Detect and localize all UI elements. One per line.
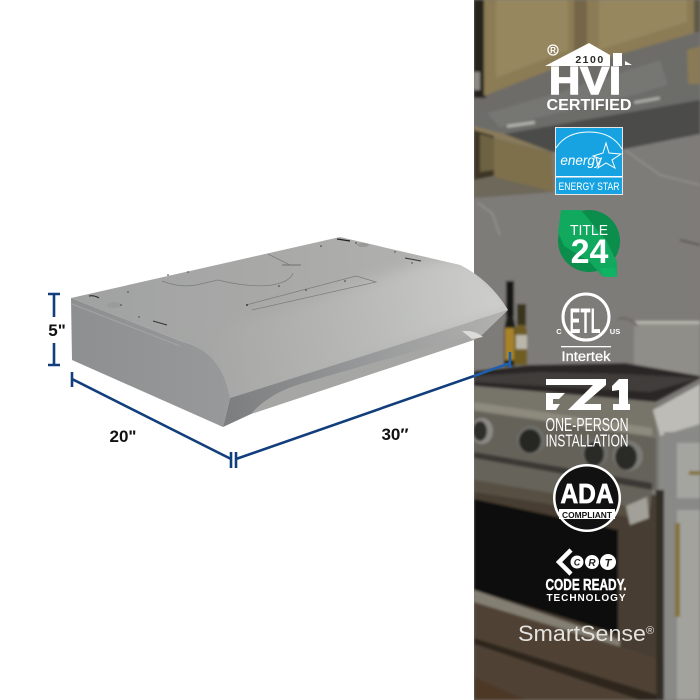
product: range hood (71, 237, 520, 427)
badge: EZ1 one-person installation (546, 379, 630, 450)
badge: Code Ready Technology: CODE READY. (546, 577, 626, 594)
dimension: height 5 inches (48, 294, 66, 365)
hood front curved panel (192, 260, 508, 398)
badge: HVI certified: 2100 (575, 54, 605, 66)
pot (634, 323, 700, 376)
control panel (474, 411, 656, 490)
badge: EZ1 one-person installation: ONE-PERSON (546, 415, 628, 435)
badge: EZ1 one-person installation: INSTALLATION (546, 430, 628, 450)
dimension: depth 20 inches: 20" (110, 427, 136, 446)
hood side face (71, 298, 230, 427)
badge: ETL listed Intertek: Intertek (562, 349, 611, 364)
dimension: width 30 inches: 30″ (381, 425, 409, 444)
badge: Energy Star: energy (560, 153, 603, 168)
badge: HVI certified: CERTIFIED (546, 97, 632, 114)
badge: Code Ready Technology: C (574, 558, 581, 568)
oven (474, 491, 658, 658)
badge: Energy Star (556, 128, 622, 194)
kitchen photo background (471, 0, 700, 700)
right cabinets (658, 424, 700, 492)
badge: ETL listed Intertek (556, 294, 620, 364)
dimension: depth 20 inches (72, 372, 231, 468)
badge: Title 24: TITLE (570, 222, 608, 239)
badge: Code Ready Technology: TECHNOLOGY (546, 593, 626, 604)
bottles (506, 281, 514, 317)
badge: ETL listed Intertek: C (556, 327, 562, 336)
hood lower front lip (223, 310, 508, 427)
stove top (474, 363, 700, 402)
dimension: height 5 inches: 5" (48, 321, 66, 340)
hood mounting holes (89, 239, 421, 325)
badge: HVI certified: HVI (549, 60, 621, 103)
badge: ADA compliant (553, 464, 621, 532)
badge: HVI certified: R (550, 46, 556, 55)
badge: Code Ready Technology: T (605, 558, 613, 570)
hood top panel outlines (162, 254, 376, 310)
badge: Title 24: 24 (571, 233, 608, 271)
badge: SmartSense: ® (646, 625, 654, 637)
badge: Code Ready Technology: R (588, 558, 596, 569)
badge: Code Ready Technology (546, 550, 626, 604)
hood top surface (71, 237, 508, 398)
badge: ETL listed Intertek: ETL (570, 302, 600, 341)
badge: ETL listed Intertek: LISTED (579, 338, 593, 342)
badge: SmartSense: SmartSense (518, 621, 646, 646)
badge: ADA compliant: COMPLIANT (562, 510, 613, 520)
badge: ETL listed Intertek: US (610, 327, 620, 336)
badge: HVI certified (545, 43, 632, 114)
badge: Title 24 (558, 210, 620, 277)
badge: ADA compliant: ADA (560, 478, 614, 509)
badge: Energy Star: ENERGY STAR (558, 181, 620, 193)
dimension: width 30 inches (236, 352, 510, 468)
